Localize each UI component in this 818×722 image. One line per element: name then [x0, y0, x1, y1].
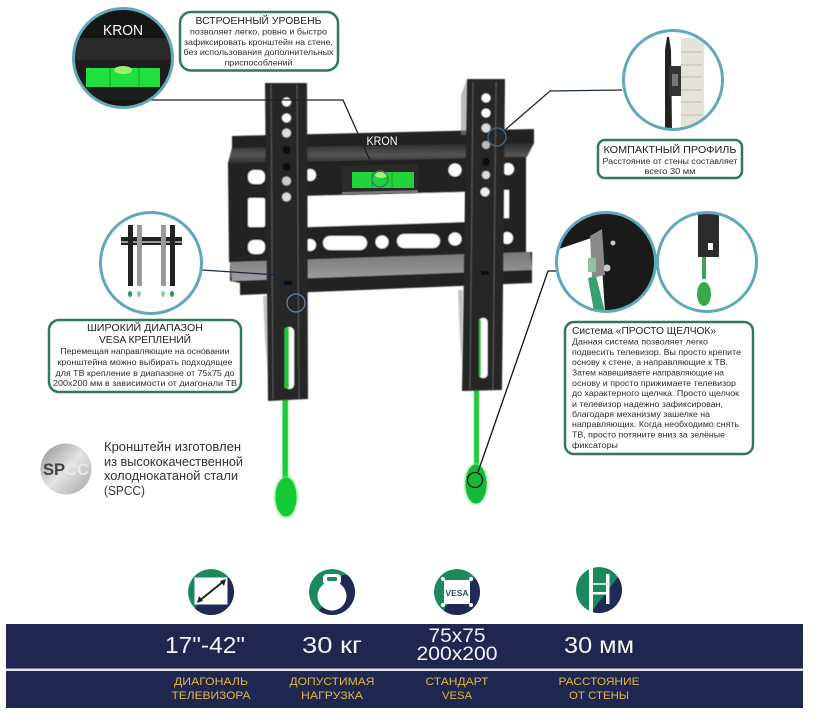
leader line: click system: [468, 271, 556, 488]
callout: built-in level: [180, 12, 338, 70]
callout: click system: основу к стене, а направляющие к ТВ.: [572, 357, 728, 367]
callout: wide VESA range: [49, 320, 241, 392]
callout: click system: до характерного щелчка. Просто щелчок: [572, 388, 739, 398]
callout: wide VESA range: кронштейна можно выбирать подходящее: [58, 357, 233, 367]
mounting bracket illustration: [228, 79, 534, 518]
text: SPCC steel note: холоднокатаной стали: [104, 468, 238, 483]
inset circle: VESA range: [100, 212, 202, 314]
spec label: load: [290, 676, 375, 702]
inset circle: wall profile: [620, 28, 726, 132]
callout: compact profile: Расстояние от стены составляет: [602, 156, 738, 166]
text: SPCC steel note: Кронштейн изготовлен: [104, 439, 241, 454]
callout: click system: и телевизор надежно зафиксирован,: [572, 399, 723, 409]
base plate: [228, 129, 534, 295]
inset circle: click mechanism: [556, 212, 656, 312]
spec label: VESA: VESA: [442, 690, 473, 702]
spec label: diagonal: ТЕЛЕВИЗОРА: [172, 690, 251, 702]
spec label: diagonal: [172, 676, 251, 702]
spec: VESA value: 75x75: [428, 626, 486, 647]
spec label: VESA: СТАНДАРТ: [426, 676, 489, 688]
left knob: [274, 400, 298, 518]
callout: click system: Система «ПРОСТО ЩЕЛЧОК»: [572, 325, 716, 337]
callout: click system: ТВ, просто потяните вниз за зелёные: [572, 430, 725, 440]
callout: wide VESA range: Перемещая направляющие на основании: [60, 346, 230, 356]
callout: compact profile: всего 30 мм: [644, 166, 696, 176]
callout: wide VESA range: ШИРОКИЙ ДИАПАЗОН: [87, 321, 203, 334]
leader line: level: [150, 100, 388, 187]
icon: VESA: [434, 569, 482, 617]
callout: click system: подвесить телевизор. Вы просто крепите: [572, 347, 741, 357]
callout: built-in level: без использования дополнительных: [184, 47, 334, 57]
callout: built-in level: ВСТРОЕННЫЙ УРОВЕНЬ: [196, 14, 322, 27]
spec: VESA value: 200x200: [416, 644, 498, 665]
icon: SPCC steel badge: [40, 444, 92, 494]
inset circle: level close-up: [72, 7, 174, 109]
spec label: distance: РАССТОЯНИЕ: [558, 676, 640, 688]
right knob: [464, 390, 488, 504]
icon: SPCC steel badge: SPCC: [43, 460, 89, 479]
leader line: VESA: [202, 270, 305, 312]
text: SPCC steel note: (SPCC): [104, 483, 145, 498]
callout: click system: Затем навешиваете направляющие на: [572, 368, 724, 378]
spec label: distance: ОТ СТЕНЫ: [569, 690, 629, 702]
left rail: [263, 83, 308, 401]
icon: diagonal: [188, 569, 236, 617]
spec: VESA value: [416, 626, 498, 665]
callout: built-in level: приспособлений: [224, 58, 293, 68]
spec: distance value: 30 мм: [564, 632, 634, 658]
spec label: distance: [558, 676, 640, 702]
text: SPCC steel note: из высококачественной: [104, 454, 243, 469]
callout: built-in level: позволяет легко, ровно и быстро: [190, 26, 327, 36]
spec label: diagonal: ДИАГОНАЛЬ: [174, 676, 248, 688]
spec label: load: ДОПУСТИМАЯ: [290, 676, 375, 688]
callout: click system: благодаря механизму зашелке на: [572, 409, 710, 419]
right rail: [458, 79, 505, 391]
callout: wide VESA range: VESA КРЕПЛЕНИЙ: [99, 333, 191, 346]
callout: built-in level: зафиксировать кронштейн на стене,: [184, 37, 333, 47]
icon: weight: [309, 569, 357, 617]
spec bar: [6, 624, 803, 708]
leader line: profile: [488, 90, 622, 146]
icon: VESA: VESA: [445, 588, 469, 598]
spec: diagonal value: 17"-42": [165, 632, 245, 658]
inset circle: level close-up: KRON: [103, 22, 143, 39]
spec label: VESA: [426, 676, 489, 702]
icon: wall distance: [576, 567, 624, 615]
callout: click system: Данная система позволяет легко: [572, 336, 708, 346]
inset circle: green latch: [657, 212, 757, 312]
callout: click system: основу и просто прижимаете телевизор: [572, 378, 736, 388]
callout: click system: направляющих. Когда необходимо снять: [572, 419, 740, 429]
callout: wide VESA range: для ТВ крепление в диапазоне от 75x75 до: [56, 368, 235, 378]
callout: compact profile: КОМПАКТНЫЙ ПРОФИЛЬ: [604, 143, 737, 156]
callout: click system: [565, 322, 753, 454]
callout: compact profile: [598, 140, 742, 178]
level vial: [342, 164, 418, 195]
callout: wide VESA range: 200x200 мм в зависимости от диагонали ТВ: [53, 378, 237, 388]
KRON logo: KRON: [366, 134, 398, 148]
spec label: load: НАГРУЗКА: [301, 690, 364, 702]
text: SPCC steel note: [104, 439, 243, 498]
callout: click system: фиксаторы: [572, 440, 618, 450]
spec: load value: 30 кг: [302, 632, 362, 658]
